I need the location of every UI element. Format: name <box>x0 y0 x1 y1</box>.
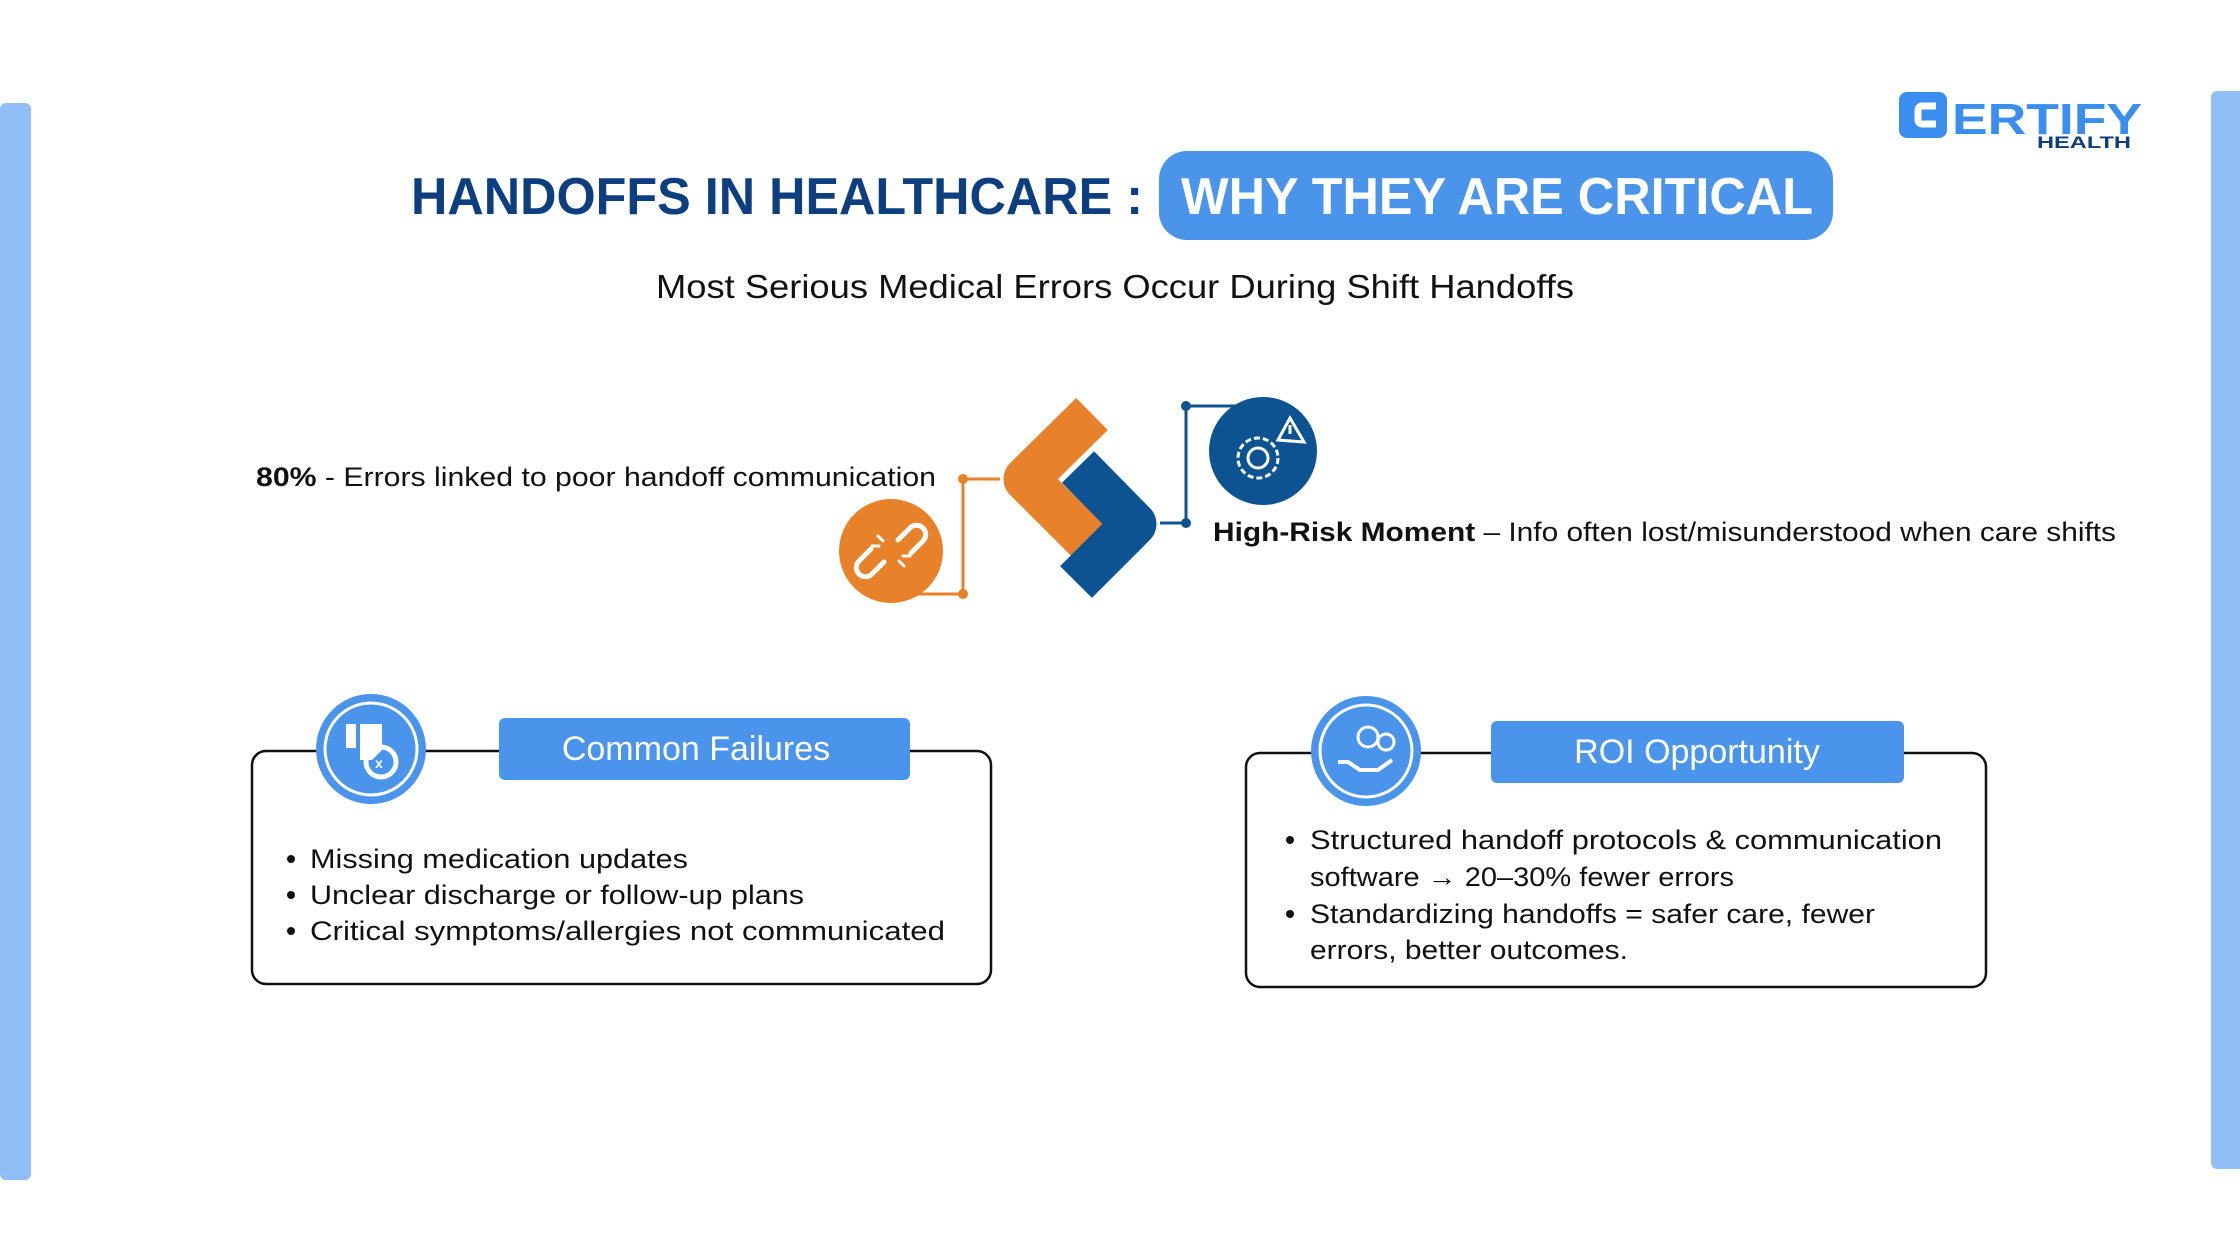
right accent bar <box>2211 91 2240 1169</box>
icon: thumbs down gear <box>316 694 426 804</box>
bullet list: Standardizing handoffs = safer care, fewer <box>1310 899 1875 929</box>
icon: gear warning <box>1209 397 1317 505</box>
subtitle: Most Serious Medical Errors Occur During Shift Handoffs <box>656 268 1574 305</box>
logo: ERTIFY <box>1952 95 2142 144</box>
title: HANDOFFS IN HEALTHCARE : <box>411 168 1143 226</box>
bullet list <box>1286 825 1942 965</box>
orange connector <box>900 474 1000 599</box>
chevron: orange left <box>1026 414 1092 543</box>
bullet list: Structured handoff protocols & communication <box>1310 825 1942 855</box>
title: WHY THEY ARE CRITICAL <box>1181 168 1813 226</box>
chevron: blue right <box>1076 467 1134 582</box>
bullet list: Critical symptoms/allergies not communicated <box>310 916 945 946</box>
panel: common failures <box>252 694 991 984</box>
panel: common failures: Common Failures <box>562 730 830 768</box>
logo <box>1899 92 2142 152</box>
panel: ROI opportunity: ROI Opportunity <box>1574 733 1820 771</box>
icon: broken chain <box>839 499 943 603</box>
logo: HEALTH <box>2037 133 2131 152</box>
icon: thumbs down gear: x <box>375 755 383 771</box>
icon: hand with money <box>1311 696 1421 806</box>
title <box>411 151 1833 240</box>
panel: ROI opportunity <box>1246 696 1986 987</box>
stat: high-risk: High-Risk Moment – Info often lost/misunderstood when care shifts <box>1213 517 2116 547</box>
bullet list: Missing medication updates <box>310 844 688 874</box>
blue connector <box>1160 401 1240 528</box>
bullet list: errors, better outcomes. <box>1310 935 1628 965</box>
bullet list <box>287 844 945 946</box>
bullet list: Unclear discharge or follow-up plans <box>310 880 804 910</box>
bullet list: software → 20–30% fewer errors <box>1310 862 1734 892</box>
stat: 80%: 80% - Errors linked to poor handoff communication <box>256 462 936 492</box>
left accent bar <box>0 103 31 1180</box>
